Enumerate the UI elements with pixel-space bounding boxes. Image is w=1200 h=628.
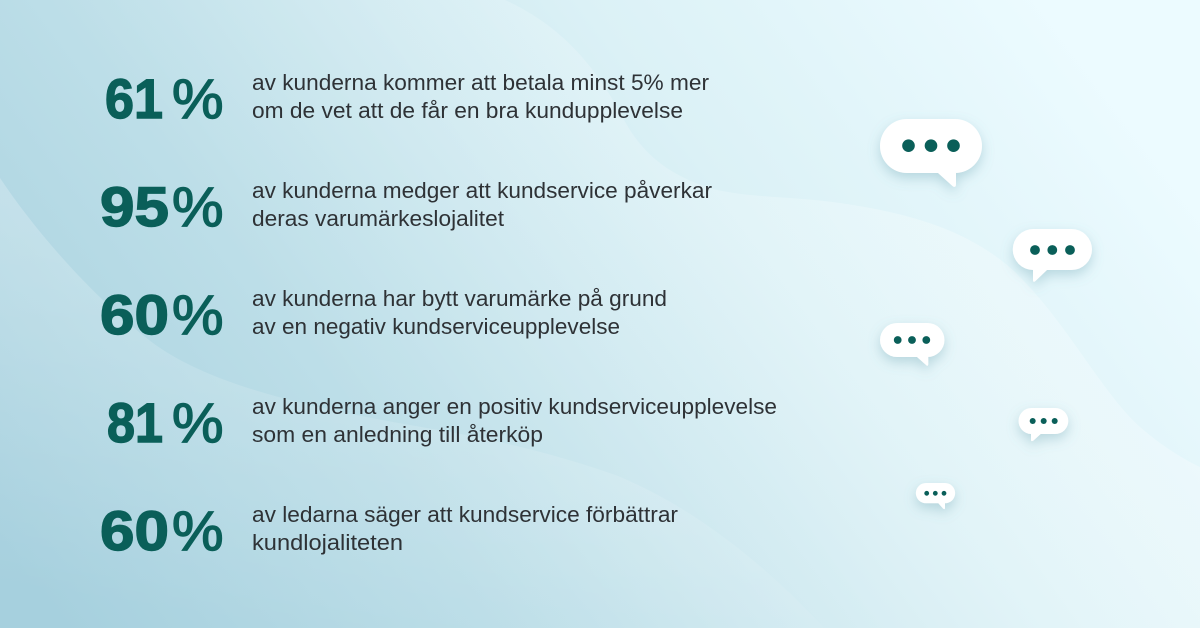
- stat row: 60%: [100, 283, 667, 346]
- stat row: 95%: [100, 175, 713, 238]
- percentage 60%: 60: [100, 499, 169, 562]
- description text: av kunderna kommer att betala minst 5% mer: [252, 70, 710, 95]
- percentage 61%: %: [172, 67, 224, 130]
- percentage 95%: 95: [100, 175, 169, 238]
- description text: [252, 178, 713, 231]
- icon: speech bubble 2: [1013, 229, 1092, 282]
- percentage 60%: 60: [100, 283, 169, 346]
- icon: speech bubble 4: [1019, 408, 1068, 441]
- description text: av kunderna har bytt varumärke på grund: [252, 286, 667, 311]
- percentage 81%: [107, 391, 224, 454]
- description text: av kunderna medger att kundservice påverkar: [252, 178, 713, 203]
- description text: av kunderna anger en positiv kundserviceupplevelse: [252, 394, 777, 419]
- icon: speech bubble 1: [880, 119, 982, 187]
- percentage 60%: %: [172, 499, 224, 562]
- description text: kundlojaliteten: [252, 530, 403, 555]
- description text: av en negativ kundserviceupplevelse: [252, 314, 620, 339]
- description text: av ledarna säger att kundservice förbättrar: [252, 502, 678, 527]
- percentage 61%: 61: [105, 67, 163, 130]
- stat row: 61%: [105, 67, 710, 130]
- percentage 95%: %: [172, 175, 224, 238]
- percentage 60%: [100, 283, 224, 346]
- percentage 61%: [105, 67, 224, 130]
- description text: som en anledning till återköp: [252, 422, 543, 447]
- percentage 60%: %: [172, 283, 224, 346]
- description text: [252, 286, 667, 339]
- percentage 60%: [100, 499, 224, 562]
- stat row: 81%: [107, 391, 777, 454]
- percentage 81%: %: [172, 391, 224, 454]
- icon: speech bubble 3: [880, 323, 944, 366]
- description text: [252, 394, 777, 447]
- percentage 81%: 81: [107, 391, 163, 454]
- description text: [252, 502, 678, 555]
- description text: deras varumärkeslojalitet: [252, 206, 505, 231]
- icon: speech bubble 5: [916, 483, 955, 509]
- percentage 95%: [100, 175, 224, 238]
- description text: om de vet att de får en bra kundupplevelse: [252, 98, 683, 123]
- stat row: 60% leaders: [100, 499, 678, 562]
- description text: [252, 70, 710, 123]
